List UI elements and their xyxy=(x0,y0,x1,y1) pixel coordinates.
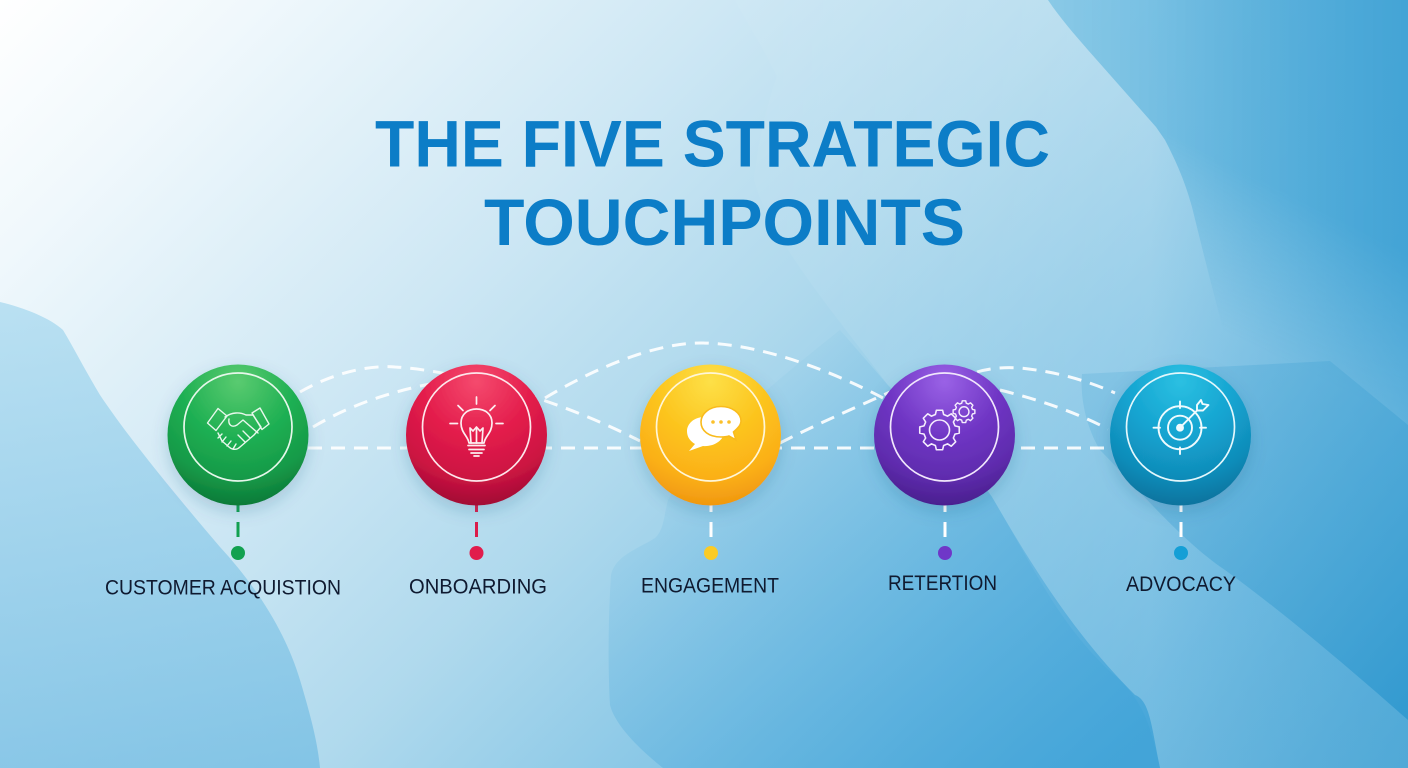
title xyxy=(375,106,1050,259)
label: CUSTOMER ACQUISTION xyxy=(105,576,341,600)
circle badge xyxy=(168,364,308,506)
icon: chat bubbles xyxy=(687,406,741,451)
ring xyxy=(1126,373,1234,481)
stem xyxy=(475,505,478,537)
circle badge xyxy=(640,364,781,506)
ring xyxy=(656,373,764,481)
dot xyxy=(1174,546,1188,560)
circle badge xyxy=(1110,364,1251,506)
icon: handshake xyxy=(208,408,269,449)
stem xyxy=(710,505,712,537)
label: ENGAGEMENT xyxy=(641,574,779,598)
title line 2: TOUCHPOINTS xyxy=(484,185,965,259)
title line 1: THE FIVE STRATEGIC xyxy=(375,106,1050,180)
label: ONBOARDING xyxy=(409,576,547,598)
touchpoint: engagement xyxy=(640,364,781,598)
stem xyxy=(944,505,946,537)
dot xyxy=(704,546,718,560)
icon: gears xyxy=(920,401,975,450)
icon: target with arrow xyxy=(1154,400,1208,454)
dot xyxy=(470,546,484,560)
label: RETERTION xyxy=(888,572,997,595)
touchpoint: customer acquisition xyxy=(105,364,341,600)
touchpoint: onboarding xyxy=(406,364,547,598)
ring xyxy=(890,373,998,481)
circle badge xyxy=(406,364,547,506)
stem xyxy=(1180,505,1182,537)
stem xyxy=(236,505,240,537)
touchpoint: retention xyxy=(874,364,1015,595)
dot xyxy=(938,546,952,560)
icon: light bulb xyxy=(450,397,503,456)
ring xyxy=(184,373,292,481)
label: ADVOCACY xyxy=(1126,573,1236,596)
ring xyxy=(422,373,530,481)
touchpoint: advocacy xyxy=(1110,364,1251,596)
dashed connectors xyxy=(300,343,1115,448)
dot xyxy=(231,546,245,560)
circle badge xyxy=(874,364,1015,506)
